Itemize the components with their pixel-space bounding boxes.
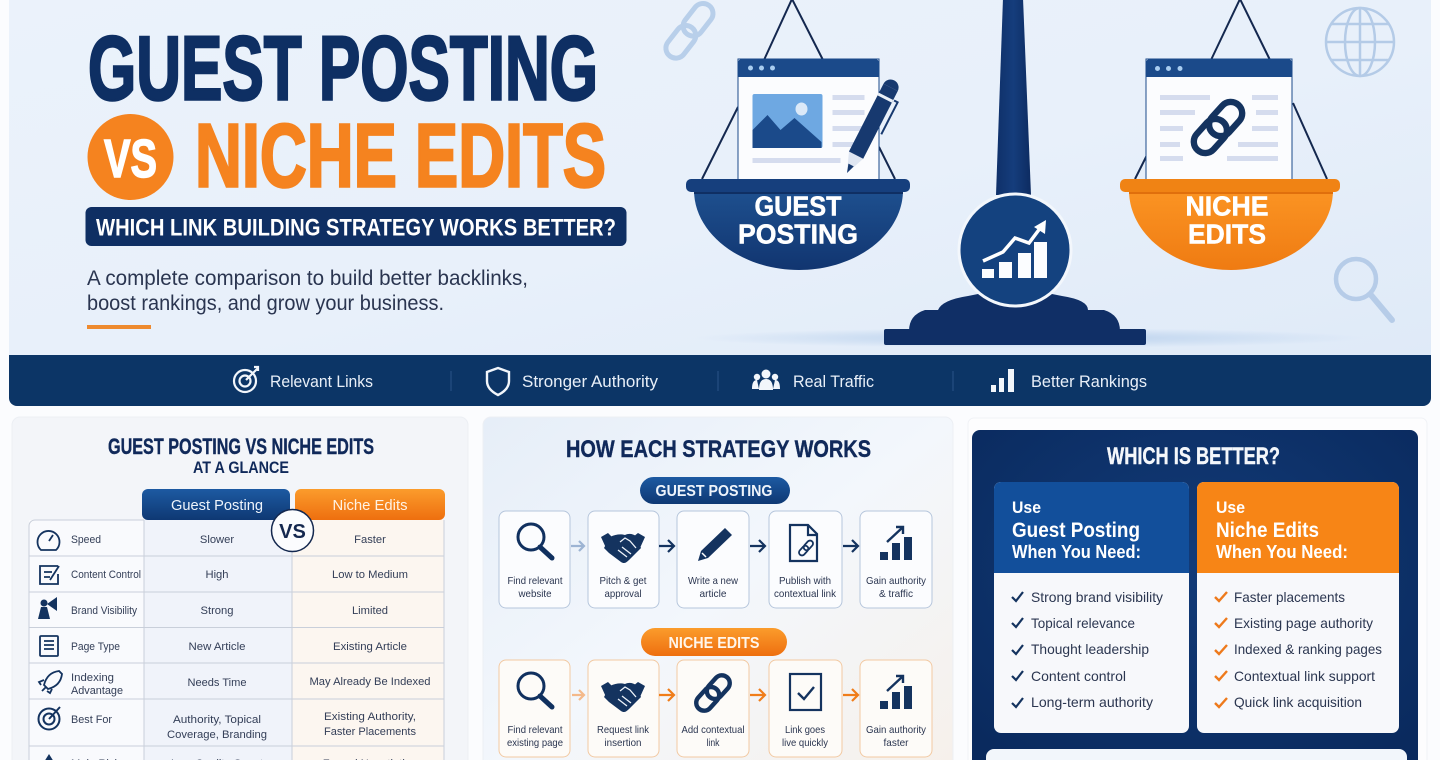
card: use niche edits: Niche Edits: [1216, 519, 1319, 542]
card: use guest posting: Topical relevance: [1031, 615, 1135, 631]
row: speed: Faster: [354, 534, 386, 546]
step 5: & traffic: [879, 588, 913, 600]
icon: pen: [840, 77, 906, 179]
scale: chart medallion: [959, 194, 1071, 306]
step 1: [508, 524, 563, 600]
icon: bars: [991, 369, 1014, 392]
hero panel: [9, 0, 1431, 357]
row: content control: Low to Medium: [332, 569, 408, 581]
step 4: [782, 674, 829, 749]
step 3: [682, 672, 744, 749]
row: content control: [40, 566, 408, 584]
step 4: Publish with: [779, 575, 831, 587]
step 3: Write a new: [688, 575, 738, 587]
panel: which is better: [968, 418, 1427, 760]
step 3: [688, 528, 738, 600]
row: speed: [38, 531, 386, 550]
label: real traffic: Real Traffic: [793, 372, 874, 391]
panel heading: GUEST POSTING VS NICHE EDITS: [108, 434, 374, 459]
card: use guest posting: Guest Posting: [1012, 519, 1140, 542]
label: better rankings: Better Rankings: [1031, 372, 1147, 391]
row: best for: Best For: [71, 714, 112, 726]
step 4: live quickly: [782, 737, 829, 749]
left bowl: [686, 179, 910, 270]
step 5: faster: [884, 737, 909, 749]
card: use guest posting: Thought leadership: [1031, 641, 1149, 657]
step 5: [866, 676, 927, 749]
row: content control: Content Control: [71, 569, 141, 581]
step 2: [600, 533, 647, 600]
icon: faint magnifier: [1336, 259, 1392, 320]
step 3: link: [706, 737, 720, 749]
card: use guest posting: [994, 482, 1189, 733]
card: use niche edits: Quick link acquisition: [1234, 694, 1362, 710]
vs circle: VS: [279, 521, 306, 543]
card: use niche edits: Indexed & ranking pages: [1234, 641, 1382, 657]
row: indexing advantage: Indexing: [71, 672, 114, 684]
row: brand visibility: [38, 597, 388, 619]
row: indexing advantage: Advantage: [71, 685, 123, 697]
pill: niche edits: [641, 628, 787, 656]
row: page type: New Article: [188, 641, 246, 653]
vs circle: [272, 510, 314, 552]
panel heading: HOW EACH STRATEGY WORKS: [566, 436, 871, 463]
row: indexing advantage: Needs Time: [188, 677, 246, 689]
title: niche edits: NICHE EDITS: [195, 106, 606, 206]
row: page type: [40, 636, 407, 656]
left bowl: POSTING: [738, 218, 858, 250]
step 1: website: [518, 588, 552, 600]
row: page type: Existing Article: [333, 641, 407, 653]
right bowl: EDITS: [1188, 218, 1266, 250]
niche edits steps: [499, 660, 932, 757]
label: stronger authority: Stronger Authority: [522, 372, 658, 391]
row: best for: Authority, Topical: [173, 714, 261, 726]
column header: niche edits: Niche Edits: [332, 498, 408, 514]
step 4: [774, 525, 837, 600]
subtitle banner: [86, 207, 626, 246]
row: best for: [38, 707, 416, 741]
card: use guest posting: Strong brand visibility: [1031, 589, 1163, 605]
row: indexing advantage: [39, 671, 430, 697]
step 5: [866, 527, 927, 600]
row: main risk: [39, 754, 417, 760]
row: brand visibility: Strong: [201, 605, 233, 617]
card: use niche edits: Use: [1216, 499, 1245, 517]
row: indexing advantage: May Already Be Indexed: [310, 676, 430, 688]
column header: guest posting: [142, 489, 290, 520]
benefits band: [9, 355, 1431, 406]
description: [87, 266, 528, 315]
browser card: guest post: [738, 59, 879, 184]
step 4: Link goes: [785, 724, 825, 736]
card: use guest posting: When You Need:: [1012, 542, 1141, 562]
right bowl: NICHE: [1186, 190, 1268, 222]
step 2: Request link: [597, 724, 650, 736]
scale: left strings: [702, 0, 895, 179]
row: content control: High: [205, 569, 229, 581]
step 5: Gain authority: [866, 575, 927, 587]
step 2: approval: [604, 588, 642, 600]
flow arrows: [572, 689, 858, 701]
card: use guest posting: Long-term authority: [1031, 694, 1153, 710]
label: relevant links: Relevant Links: [270, 372, 373, 391]
step 3: Add contextual: [682, 724, 744, 736]
left bowl: GUEST: [754, 190, 842, 222]
panel heading: WHICH IS BETTER?: [1107, 443, 1280, 470]
panel subheading: AT A GLANCE: [193, 458, 289, 477]
vs badge: [88, 114, 174, 200]
title: guest posting: GUEST POSTING: [88, 18, 598, 120]
right bowl: [1120, 179, 1340, 270]
row: speed: Speed: [71, 534, 101, 546]
step 4: contextual link: [774, 588, 837, 600]
row: speed: Slower: [200, 534, 234, 546]
icon: target: [234, 367, 258, 392]
row: page type: Page Type: [71, 641, 120, 653]
vs badge: VS: [104, 129, 157, 189]
card: use guest posting: Content control: [1031, 668, 1126, 684]
comparison table body: [29, 520, 444, 760]
description: boost rankings, and grow your business.: [87, 291, 444, 315]
panel: at a glance comparison: [12, 417, 468, 760]
pill: guest posting: GUEST POSTING: [656, 483, 772, 500]
column header: guest posting: Guest Posting: [171, 498, 263, 514]
column header: niche edits: [295, 489, 445, 520]
row: best for: Existing Authority,: [324, 711, 416, 723]
step 1: Find relevant: [508, 575, 563, 587]
bottom verdict card: [986, 749, 1407, 760]
pill: niche edits: NICHE EDITS: [668, 635, 760, 652]
card: use niche edits: Contextual link support: [1234, 668, 1375, 684]
icon: shield: [487, 368, 509, 395]
accent underline: [87, 325, 151, 329]
subtitle banner: WHICH LINK BUILDING STRATEGY WORKS BETTER?: [96, 214, 616, 242]
description: A complete comparison to build better backlinks,: [87, 266, 528, 290]
card: use niche edits: [1197, 482, 1399, 733]
row: best for: Coverage, Branding: [167, 729, 267, 741]
ground shadow: [695, 328, 1365, 348]
step 5: Gain authority: [866, 724, 927, 736]
scale: pole: [996, 0, 1031, 195]
row: brand visibility: Limited: [352, 605, 388, 617]
pill: guest posting: [640, 477, 790, 504]
scale: right strings: [1135, 0, 1327, 179]
flow arrows: [571, 540, 858, 552]
row: brand visibility: Brand Visibility: [71, 605, 137, 617]
step 1: Find relevant: [508, 724, 563, 736]
step 1: [507, 673, 563, 749]
step 3: article: [700, 588, 727, 600]
icon: people: [752, 370, 780, 390]
card: use niche edits: Faster placements: [1234, 589, 1345, 605]
panel: how each strategy works: [483, 417, 953, 760]
card: use niche edits: Existing page authority: [1234, 615, 1373, 631]
card: use guest posting: Use: [1012, 499, 1041, 517]
card: use niche edits: When You Need:: [1216, 542, 1348, 562]
step 2: insertion: [604, 737, 642, 749]
step 2: Pitch & get: [600, 575, 647, 587]
browser card: niche edit: [1146, 59, 1292, 184]
icon: faint globe: [1326, 8, 1394, 76]
icon: faint chain: [662, 0, 717, 62]
guest posting steps: [499, 511, 932, 608]
step 2: [597, 682, 650, 749]
scale: base: [884, 290, 1146, 345]
row: best for: Faster Placements: [324, 726, 416, 738]
step 1: existing page: [507, 737, 563, 749]
